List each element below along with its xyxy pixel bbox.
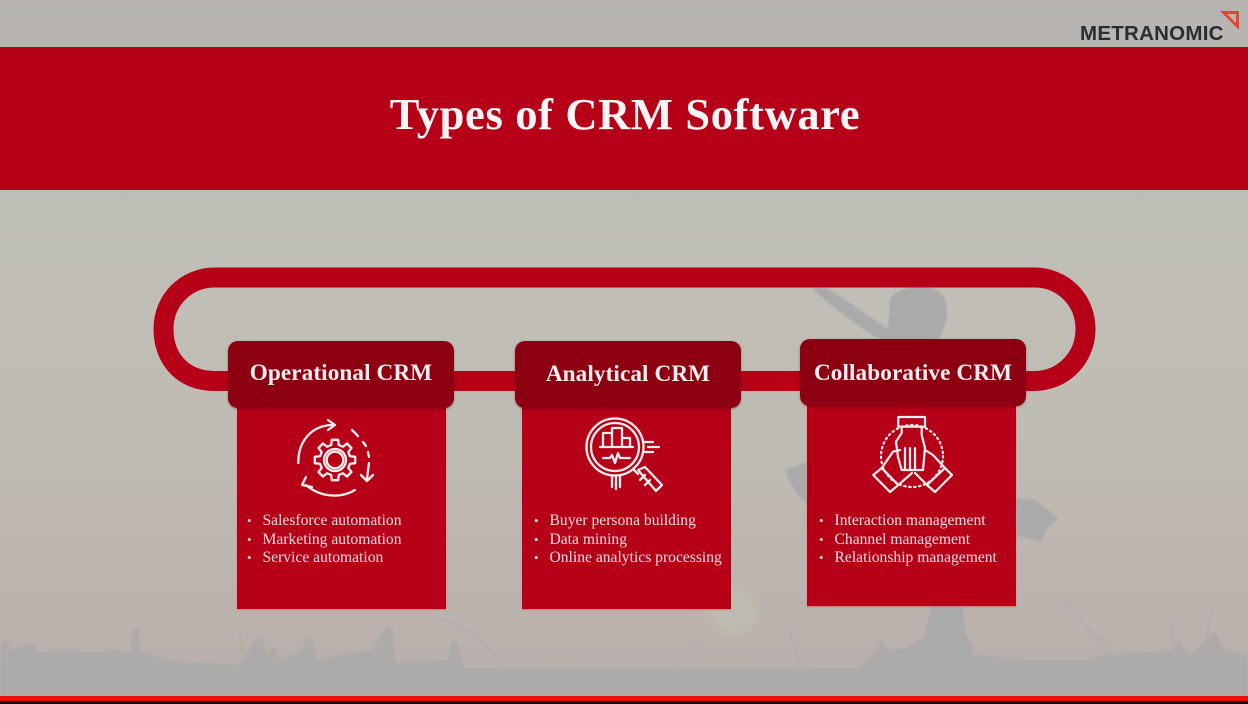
panel: Collaborative CRM xyxy=(798,338,1028,608)
bullet list: Salesforce automation xyxy=(262,512,402,529)
bullet list: Interaction management xyxy=(834,512,986,529)
icon: magnifier with chart xyxy=(585,417,664,492)
bullet list xyxy=(820,512,997,566)
bullet list: Channel management xyxy=(834,531,970,548)
heading: Analytical CRM xyxy=(546,361,710,387)
bullet list: Buyer persona building xyxy=(550,512,696,529)
title banner xyxy=(0,47,1248,190)
bullet list xyxy=(534,512,722,566)
bullet list: Marketing automation xyxy=(262,531,402,548)
bullet list: Online analytics processing xyxy=(550,549,722,566)
bullet list xyxy=(248,512,402,566)
grass tufts xyxy=(0,625,1248,672)
footer bar xyxy=(0,696,1248,704)
panel: Analytical CRM xyxy=(514,340,742,610)
icon: three joined hands xyxy=(872,416,954,494)
title: Types of CRM Software xyxy=(390,89,860,139)
heading xyxy=(228,341,454,408)
panel: Operational CRM xyxy=(226,340,456,610)
bullet list: Relationship management xyxy=(834,549,997,566)
heading: Operational CRM xyxy=(250,360,432,386)
logo: Metranomic xyxy=(1080,11,1239,45)
heading xyxy=(515,341,741,408)
logo wordmark: METRANOMIC xyxy=(1080,22,1224,45)
bullet list: Data mining xyxy=(550,531,627,548)
card body xyxy=(522,401,731,609)
logo triangle mark xyxy=(1220,11,1239,30)
heading: Collaborative CRM xyxy=(814,360,1012,386)
heading xyxy=(800,339,1026,406)
card body xyxy=(807,399,1016,606)
bullet list: Service automation xyxy=(262,549,383,566)
card body xyxy=(237,401,446,609)
icon: gear with cycle arrows xyxy=(297,418,374,497)
